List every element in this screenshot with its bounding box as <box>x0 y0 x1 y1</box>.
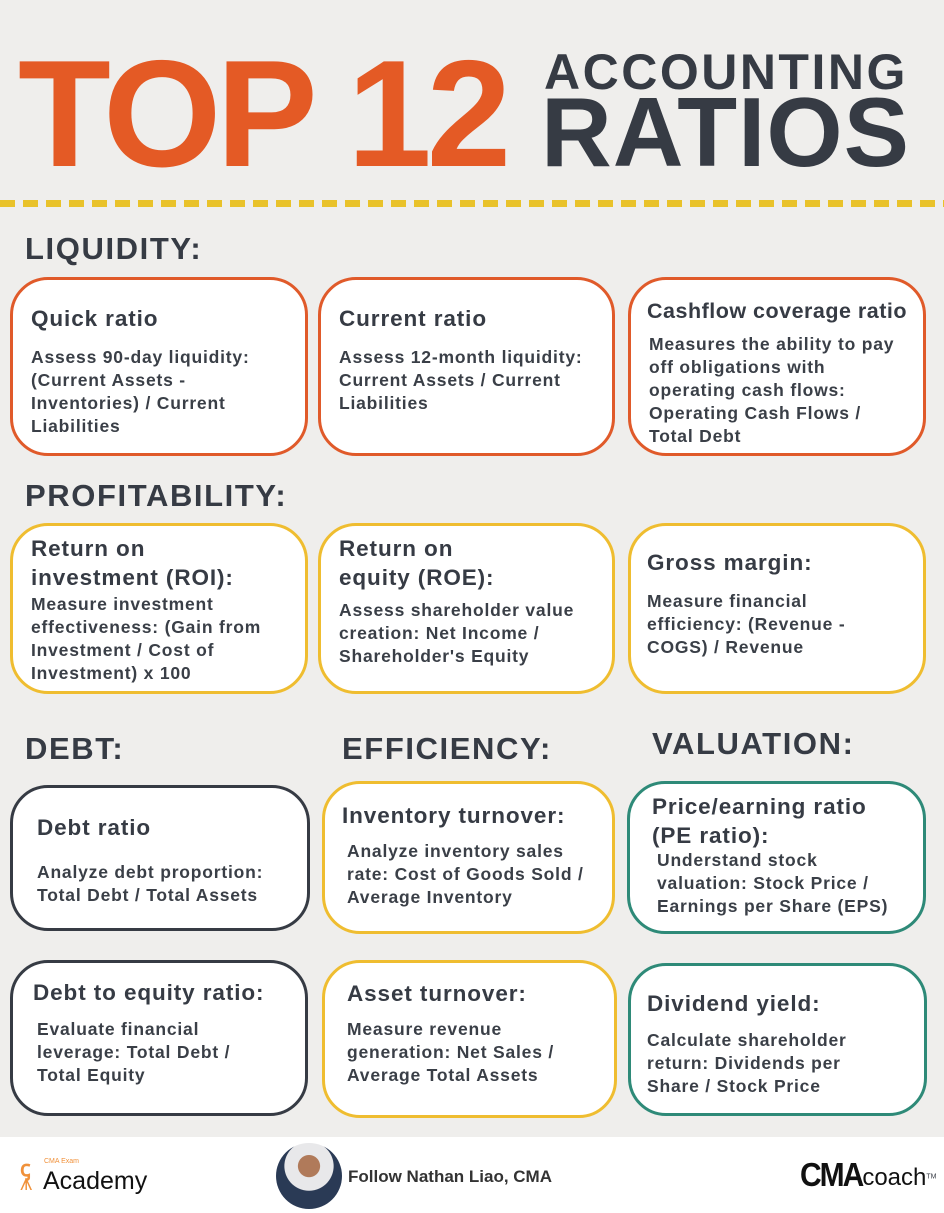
card: ROE: equity (ROE): <box>339 565 494 590</box>
card: Quick ratio: (Current Assets - <box>31 370 186 390</box>
heading: VALUATION: VALUATION: <box>652 726 855 761</box>
card: Current ratio: Assess 12-month liquidity: <box>339 347 582 367</box>
card: Quick ratio: Liabilities <box>31 416 121 436</box>
card: Inventory turnover: Inventory turnover: <box>342 803 565 828</box>
card: PE ratio: Price/earning ratio <box>652 794 867 819</box>
logo: CMA Exam Academy: ꞔ <box>20 1156 31 1181</box>
heading: LIQUIDITY: LIQUIDITY: <box>25 231 202 266</box>
card: Cashflow coverage ratio: off obligations with <box>649 357 825 377</box>
card: Current ratio <box>318 277 615 456</box>
card: Asset turnover <box>322 960 617 1118</box>
card: ROI <box>10 523 308 694</box>
card: Debt ratio: Total Debt / Total Assets <box>37 885 258 905</box>
heading: PROFITABILITY: PROFITABILITY: <box>25 478 287 513</box>
card: Asset turnover: Measure revenue <box>347 1019 502 1039</box>
heading: DEBT: DEBT: <box>25 731 124 766</box>
card: Debt to equity ratio: Evaluate financial <box>37 1019 199 1039</box>
card: ROE <box>318 523 615 694</box>
card: ROI: investment (ROI): <box>31 565 234 590</box>
photo: Nathan Liao <box>276 1143 342 1209</box>
title: ACCOUNTING: ACCOUNTING <box>544 44 908 100</box>
card: Asset turnover: Asset turnover: <box>347 981 527 1006</box>
card: ROE: Shareholder's Equity <box>339 646 529 666</box>
card: PE ratio: Understand stock <box>657 850 818 870</box>
card: Debt to equity ratio: Debt to equity ratio: <box>33 980 264 1005</box>
card: Cashflow coverage ratio: Total Debt <box>649 426 741 446</box>
card: PE ratio: valuation: Stock Price / <box>657 873 869 893</box>
card: Gross margin: Measure financial <box>647 591 807 611</box>
card: Asset turnover: Average Total Assets <box>347 1065 538 1085</box>
card: Gross margin: COGS) / Revenue <box>647 637 804 657</box>
card: Cashflow coverage ratio: operating cash flows: <box>649 380 846 400</box>
card: Inventory turnover: rate: Cost of Goods Sold / <box>347 864 584 884</box>
card: Quick ratio <box>10 277 308 456</box>
title: TOP 12: TOP 12 <box>18 29 506 199</box>
title: RATIOS: RATIOS <box>541 77 910 187</box>
card: PE ratio <box>627 781 926 934</box>
card: Cashflow coverage ratio: Cashflow coverage ratio <box>647 299 907 323</box>
card: Dividend yield: Dividend yield: <box>647 991 821 1016</box>
card: Cashflow coverage ratio: Measures the ability to pay <box>649 334 894 354</box>
card: Quick ratio: Inventories) / Current <box>31 393 226 413</box>
text: Follow Nathan Liao: Follow Nathan Liao, CMA <box>348 1167 552 1186</box>
footer <box>0 1137 944 1213</box>
card: Inventory turnover: Analyze inventory sales <box>347 841 564 861</box>
card: Dividend yield <box>628 963 927 1116</box>
logo: CMAcoach: coachTM <box>862 1164 936 1191</box>
logo: CMA Exam Academy <box>20 1156 148 1195</box>
card: ROI: Measure investment <box>31 594 214 614</box>
card: Current ratio: Current ratio <box>339 306 487 331</box>
card: Asset turnover: generation: Net Sales / <box>347 1042 554 1062</box>
card: Gross margin: Gross margin: <box>647 550 812 575</box>
card: Quick ratio: Assess 90-day liquidity: <box>31 347 250 367</box>
card: Inventory turnover: Average Inventory <box>347 887 513 907</box>
card: ROI: effectiveness: (Gain from <box>31 617 261 637</box>
card: Current ratio: Current Assets / Current <box>339 370 561 390</box>
card: ROE: Return on <box>339 536 453 561</box>
card: Gross margin <box>628 523 926 694</box>
card: ROI: Investment / Cost of <box>31 640 214 660</box>
card: PE ratio: (PE ratio): <box>652 823 769 848</box>
card: Debt to equity ratio: Total Equity <box>37 1065 145 1085</box>
heading: EFFICIENCY: EFFICIENCY: <box>342 731 552 766</box>
card: Dividend yield: Calculate shareholder <box>647 1030 847 1050</box>
card: ROI: Investment) x 100 <box>31 663 191 683</box>
card: Dividend yield: Share / Stock Price <box>647 1076 821 1096</box>
card: PE ratio: Earnings per Share (EPS) <box>657 896 888 916</box>
logo: CMAcoach <box>800 1157 936 1194</box>
card: ROI: Return on <box>31 536 145 561</box>
card: Dividend yield: return: Dividends per <box>647 1053 841 1073</box>
logo: CMAcoach: CMA <box>800 1157 862 1194</box>
card: Cashflow coverage ratio <box>628 277 926 456</box>
card: Gross margin: efficiency: (Revenue - <box>647 614 846 634</box>
card: ROE: Assess shareholder value <box>339 600 574 620</box>
card: Debt ratio: Debt ratio <box>37 815 151 840</box>
card: Debt to equity ratio: leverage: Total Debt / <box>37 1042 230 1062</box>
card: Current ratio: Liabilities <box>339 393 429 413</box>
card: Debt ratio: Analyze debt proportion: <box>37 862 263 882</box>
card: Inventory turnover <box>322 781 615 934</box>
card: Cashflow coverage ratio: Operating Cash Flows / <box>649 403 861 423</box>
card: Debt ratio <box>10 785 310 931</box>
dashed divider <box>0 200 944 207</box>
card: ROE: creation: Net Income / <box>339 623 539 643</box>
logo: CMA Exam Academy: Academy <box>43 1167 147 1195</box>
card: Quick ratio: Quick ratio <box>31 306 158 331</box>
logo: CMA Exam Academy: CMA Exam <box>44 1158 79 1165</box>
card: Debt to equity ratio <box>10 960 308 1116</box>
logo: CMA Exam Academy: ⩚ <box>20 1170 32 1195</box>
